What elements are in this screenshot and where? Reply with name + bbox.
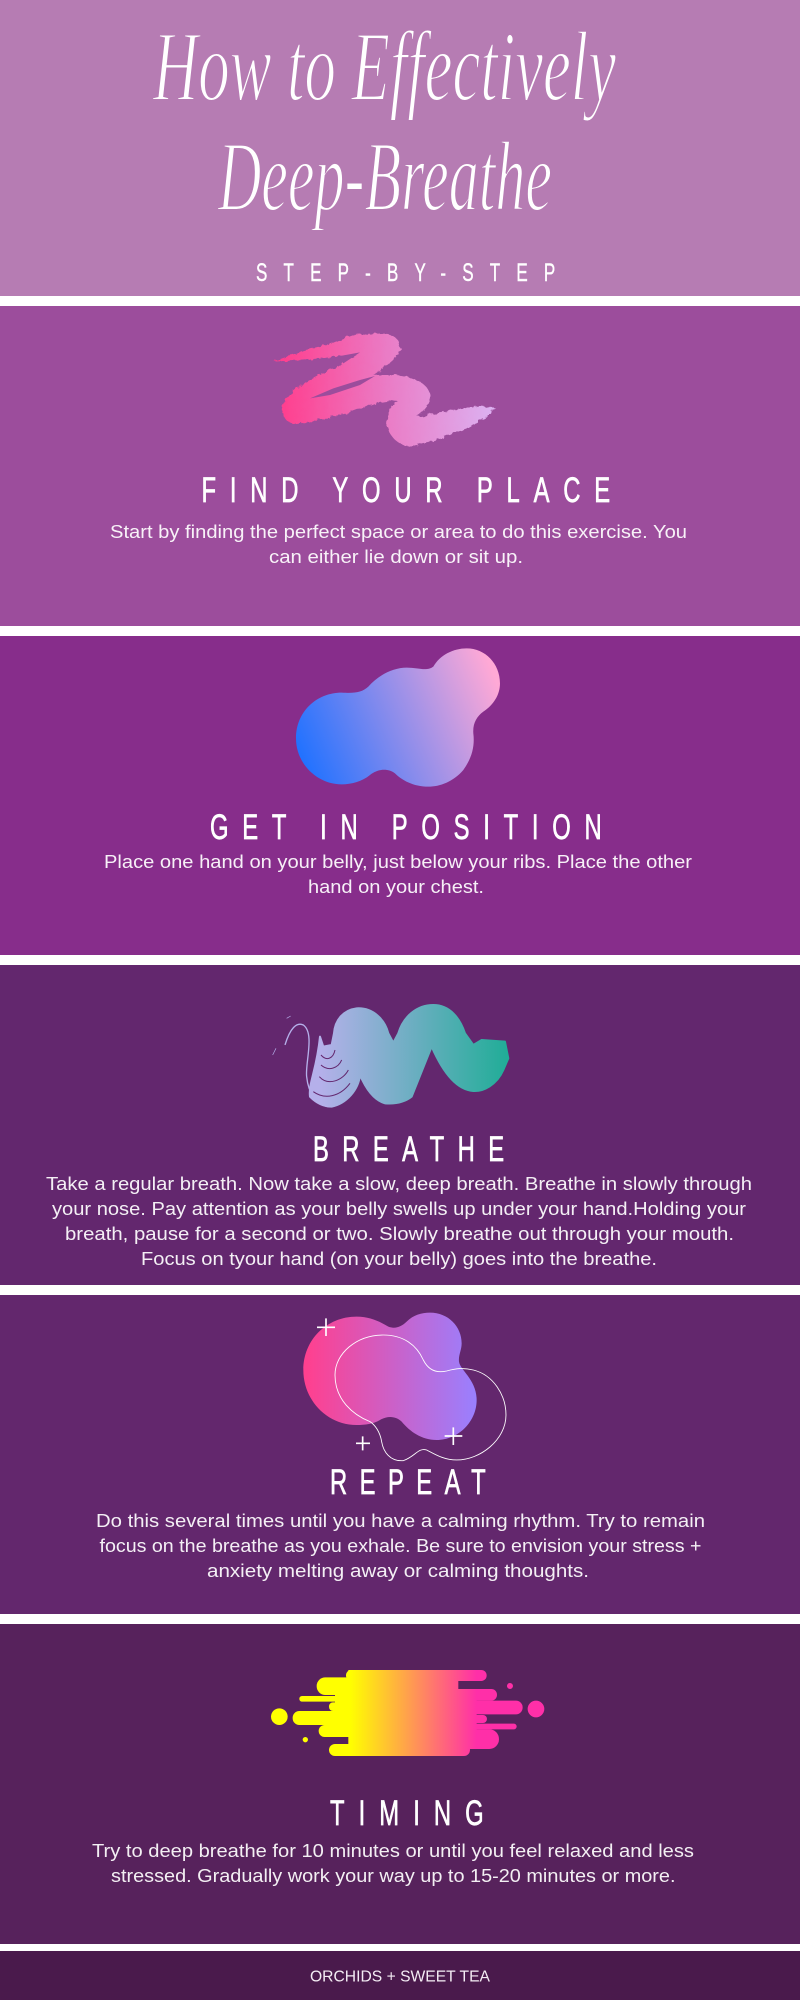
subtitle: STEP-BY-STEP — [256, 259, 555, 287]
icon: yellow pink speed bars — [271, 1670, 544, 1756]
heading: FIND YOUR PLACE — [202, 472, 610, 510]
heading: BREATHE — [313, 1131, 504, 1169]
panel: repeat — [0, 1295, 800, 1614]
text block: Do this several times until you have a calming rhythm. Try to remain — [96, 1510, 705, 1531]
title: Deep-Breathe — [217, 121, 552, 232]
text block — [46, 1173, 752, 1269]
text block: Focus on tyour hand (on your belly) goes into the breathe. — [141, 1248, 657, 1269]
heading: GET IN POSITION — [210, 809, 602, 847]
text block — [104, 851, 692, 897]
text block: your nose. Pay attention as your belly swells up under your hand.Holding your — [52, 1198, 746, 1219]
panel: find your place — [0, 306, 800, 626]
text block — [110, 521, 687, 567]
icon: pink brush stroke — [273, 333, 495, 446]
text block: Try to deep breathe for 10 minutes or until you feel relaxed and less — [92, 1840, 694, 1861]
icon: teal wave brush stroke — [273, 1005, 508, 1107]
title — [152, 11, 616, 232]
icon: pink purple blob with outline and plus signs — [303, 1313, 506, 1461]
text block: hand on your chest. — [308, 876, 484, 897]
text block: focus on the breathe as you exhale. Be sure to envision your stress + — [100, 1535, 702, 1556]
text block — [92, 1840, 694, 1886]
text block: anxiety melting away or calming thoughts. — [207, 1560, 589, 1581]
text block: Place one hand on your belly, just below your ribs. Place the other — [104, 851, 692, 872]
heading: REPEAT — [330, 1464, 486, 1502]
panel: get in position — [0, 636, 800, 955]
panel: breathe — [0, 965, 800, 1285]
text block: Take a regular breath. Now take a slow, deep breath. Breathe in slowly through — [46, 1173, 752, 1194]
panel: timing — [0, 1624, 800, 1944]
text block: breath, pause for a second or two. Slowly breathe out through your mouth. — [65, 1223, 734, 1244]
text block — [96, 1510, 705, 1581]
icon: blue pink blob — [296, 648, 500, 787]
heading: TIMING — [330, 1795, 484, 1833]
text block: Start by finding the perfect space or area to do this exercise. You — [110, 521, 687, 542]
text block: stressed. Gradually work your way up to 15-20 minutes or more. — [111, 1865, 676, 1886]
panel: footer — [0, 1951, 800, 2000]
panel: header — [0, 0, 800, 296]
text block: can either lie down or sit up. — [269, 546, 523, 567]
footer text: ORCHIDS + SWEET TEA — [310, 1968, 491, 1986]
